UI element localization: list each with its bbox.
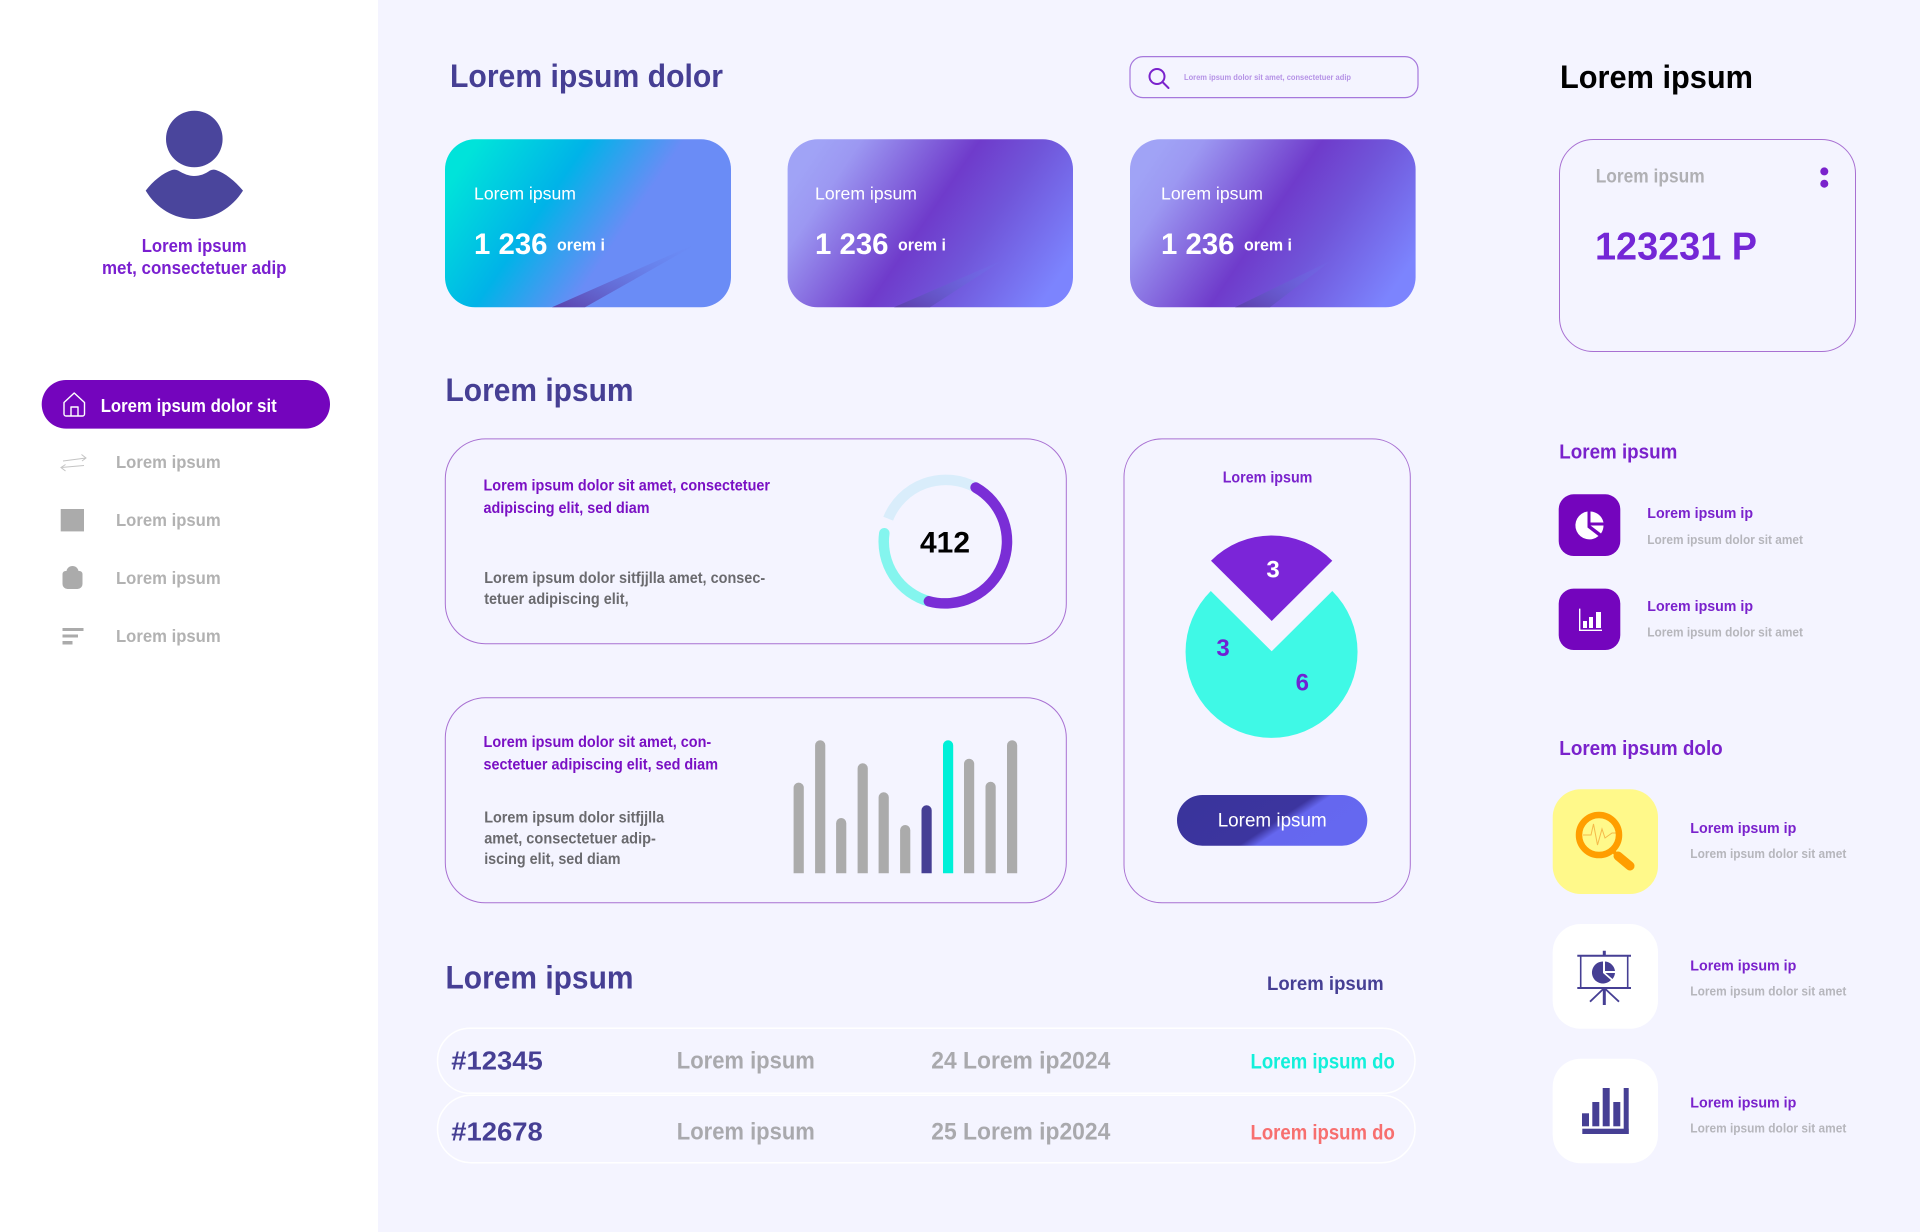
nav item: transfers <box>61 452 221 472</box>
list item: presentation: Lorem ipsum dolor sit amet <box>1690 984 1847 998</box>
table row 1: #12345 <box>451 1046 543 1076</box>
panel heading <box>484 734 718 774</box>
panel heading <box>484 478 770 517</box>
nav item: transfers: Lorem ipsum <box>116 452 221 472</box>
table row 2: #12678 <box>451 1116 543 1146</box>
icon: presentation board <box>1577 951 1631 1005</box>
pie chart: 6 <box>1296 670 1309 697</box>
stat card 2: Lorem ipsum <box>815 183 917 203</box>
panel description: iscing elit, sed diam <box>484 851 620 868</box>
panel description <box>484 570 765 608</box>
stat card 1: Lorem ipsum <box>474 183 576 203</box>
nav item: list <box>62 626 221 646</box>
icon: pie <box>1575 512 1604 539</box>
list item: pie <box>1559 494 1804 556</box>
table link: Lorem ipsum <box>1267 974 1384 995</box>
list item: bar icon: Lorem ipsum dolor sit amet <box>1690 1120 1847 1136</box>
profile name: Lorem ipsum <box>142 236 247 256</box>
list item: bar icon: Lorem ipsum ip <box>1690 1094 1796 1112</box>
stat card 1: orem i <box>557 236 605 255</box>
panel heading: Lorem ipsum <box>1223 470 1312 487</box>
table row 2: Lorem ipsum <box>677 1118 815 1145</box>
panel: balance: 123231 P <box>1595 226 1757 269</box>
nav item: square <box>61 509 221 531</box>
icon: bars <box>1579 609 1602 631</box>
nav item: square: Lorem ipsum <box>116 510 221 530</box>
panel: bar summary <box>445 698 1066 903</box>
button <box>1177 795 1367 846</box>
list item: magnifier: Lorem ipsum ip <box>1690 820 1796 837</box>
icon: search <box>1150 69 1168 88</box>
nav item: active: Lorem ipsum dolor sit <box>101 396 277 416</box>
list item: bar icon <box>1553 1059 1847 1163</box>
stat card 1: 1 236 <box>474 228 548 261</box>
panel: pie chart <box>1124 439 1410 903</box>
bar chart <box>794 740 1017 873</box>
panel description: Lorem ipsum dolor sitfjjlla <box>484 810 664 827</box>
panel: balance <box>1560 140 1856 352</box>
nav item: active <box>42 380 330 429</box>
panel: donut summary <box>445 439 1066 644</box>
heading: list one: Lorem ipsum <box>1559 442 1677 464</box>
stat card 1 <box>445 139 731 307</box>
button: Lorem ipsum <box>1218 811 1327 832</box>
list item: bars: Lorem ipsum ip <box>1647 599 1753 615</box>
nav item: bag <box>62 566 221 589</box>
heading: section three: Lorem ipsum <box>446 960 634 996</box>
panel description: Lorem ipsum dolor sitfjjlla amet, consec- <box>484 570 765 587</box>
stat card 2 <box>788 139 1073 307</box>
list item: pie: Lorem ipsum dolor sit amet <box>1647 533 1804 547</box>
heading: main title: Lorem ipsum dolor <box>450 58 723 94</box>
panel description: tetuer adipiscing elit, <box>484 591 629 608</box>
pie chart <box>1186 535 1358 738</box>
panel heading: adipiscing elit, sed diam <box>484 500 650 517</box>
panel description <box>484 810 664 868</box>
icon: home <box>64 393 84 416</box>
icon: menu dots <box>1820 167 1828 188</box>
list item: magnifier: Lorem ipsum dolor sit amet <box>1690 846 1847 861</box>
profile name: met, consectetuer adip <box>102 258 286 278</box>
pie chart: 3 <box>1216 635 1230 662</box>
nav item: list: Lorem ipsum <box>116 626 221 646</box>
stat card 3: orem i <box>1244 236 1292 255</box>
stat card 2: orem i <box>898 236 946 255</box>
panel description: amet, consectetuer adip- <box>484 830 656 847</box>
list item: pie: Lorem ipsum ip <box>1647 506 1753 522</box>
table row 2: Lorem ipsum do <box>1250 1122 1395 1145</box>
table row 1: 24 Lorem ip2024 <box>931 1047 1111 1074</box>
nav item: bag: Lorem ipsum <box>116 568 221 588</box>
search box <box>1130 57 1418 98</box>
panel heading: Lorem ipsum dolor sit amet, con- <box>484 734 711 751</box>
list item: presentation <box>1553 924 1847 1029</box>
heading: section two: Lorem ipsum <box>446 372 634 408</box>
icon: magnifier <box>1579 815 1630 866</box>
icon: bar chart <box>1582 1088 1629 1134</box>
panel: sidebar <box>0 0 378 1232</box>
icon: user avatar <box>146 111 243 219</box>
list item: bars <box>1559 589 1804 650</box>
stat card 3 <box>1130 139 1416 307</box>
table row 1: Lorem ipsum do <box>1250 1051 1395 1074</box>
panel heading: Lorem ipsum dolor sit amet, consectetuer <box>484 478 770 494</box>
list item: bars: Lorem ipsum dolor sit amet <box>1647 626 1804 640</box>
heading: list two: Lorem ipsum dolo <box>1559 738 1723 760</box>
panel heading: sectetuer adipiscing elit, sed diam <box>484 757 718 774</box>
panel: balance: Lorem ipsum <box>1596 166 1705 188</box>
donut chart <box>884 480 1007 603</box>
table row 1: Lorem ipsum <box>677 1047 815 1074</box>
stat card 2: 1 236 <box>815 228 888 261</box>
profile name <box>102 236 286 278</box>
stat card 3: Lorem ipsum <box>1161 183 1263 203</box>
heading: right column: Lorem ipsum <box>1560 59 1753 95</box>
list item: magnifier <box>1553 789 1847 894</box>
list item: presentation: Lorem ipsum ip <box>1690 958 1796 974</box>
table row 2 <box>438 1095 1415 1163</box>
donut chart: 412 <box>920 526 970 559</box>
table row 1 <box>438 1028 1415 1093</box>
search box: Lorem ipsum dolor sit amet, consectetuer adip <box>1184 73 1351 82</box>
stat card 3: 1 236 <box>1161 228 1234 261</box>
pie chart: 3 <box>1266 556 1280 583</box>
table row 2: 25 Lorem ip2024 <box>931 1118 1111 1145</box>
